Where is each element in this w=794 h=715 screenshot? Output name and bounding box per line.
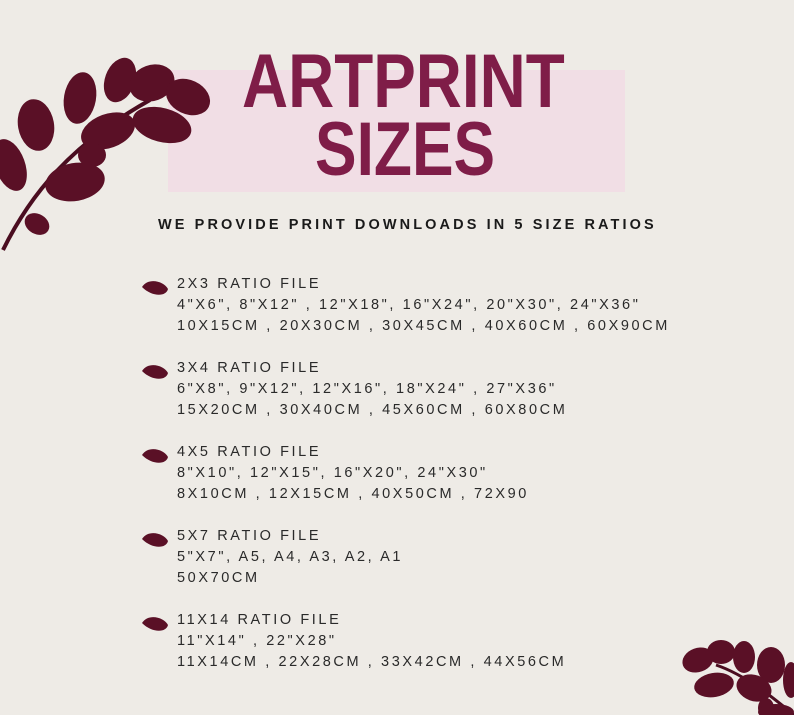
title background box xyxy=(168,70,625,192)
leaf branch top-left xyxy=(0,58,210,251)
item: 3x4 xyxy=(142,360,567,418)
item: 2x3: 4"X6", 8"X12" , 12"X18", 16"X24", 20"X30", 24"X36" xyxy=(177,297,640,313)
item: 3x4: 3X4 RATIO FILE xyxy=(177,360,321,376)
leaf branch bottom-right xyxy=(682,640,794,715)
title: SIZES xyxy=(315,107,495,192)
item: 3x4: 6"X8", 9"X12", 12"X16", 18"X24" , 27"X36" xyxy=(177,381,557,397)
item: 11x14 xyxy=(142,612,566,670)
item: 11x14: 11"X14" , 22"X28" xyxy=(177,633,337,649)
item: 4x5: 8X10CM , 12X15CM , 40X50CM , 72X90 xyxy=(177,486,529,502)
item: 11x14: 11X14CM , 22X28CM , 33X42CM , 44X56CM xyxy=(177,654,566,670)
item: 5x7: 5"X7", A5, A4, A3, A2, A1 xyxy=(177,549,403,565)
item: 4x5 xyxy=(142,444,529,502)
title: ARTPRINT xyxy=(242,39,565,124)
subtitle: WE PROVIDE PRINT DOWNLOADS IN 5 SIZE RATIOS xyxy=(158,217,657,233)
item: 5x7 xyxy=(142,528,403,586)
title xyxy=(242,39,565,192)
item: 4x5: 4X5 RATIO FILE xyxy=(177,444,321,460)
item: 11x14: 11X14 RATIO FILE xyxy=(177,612,341,628)
item: 2x3: 2X3 RATIO FILE xyxy=(177,276,321,292)
item: 5x7: 5X7 RATIO FILE xyxy=(177,528,321,544)
item: 3x4: 15X20CM , 30X40CM , 45X60CM , 60X80CM xyxy=(177,402,567,418)
item: 2x3: 10X15CM , 20X30CM , 30X45CM , 40X60CM , 60X90CM xyxy=(177,318,670,334)
item: 2x3 xyxy=(142,276,670,334)
item: 4x5: 8"X10", 12"X15", 16"X20", 24"X30" xyxy=(177,465,488,481)
item: 5x7: 50X70CM xyxy=(177,570,260,586)
